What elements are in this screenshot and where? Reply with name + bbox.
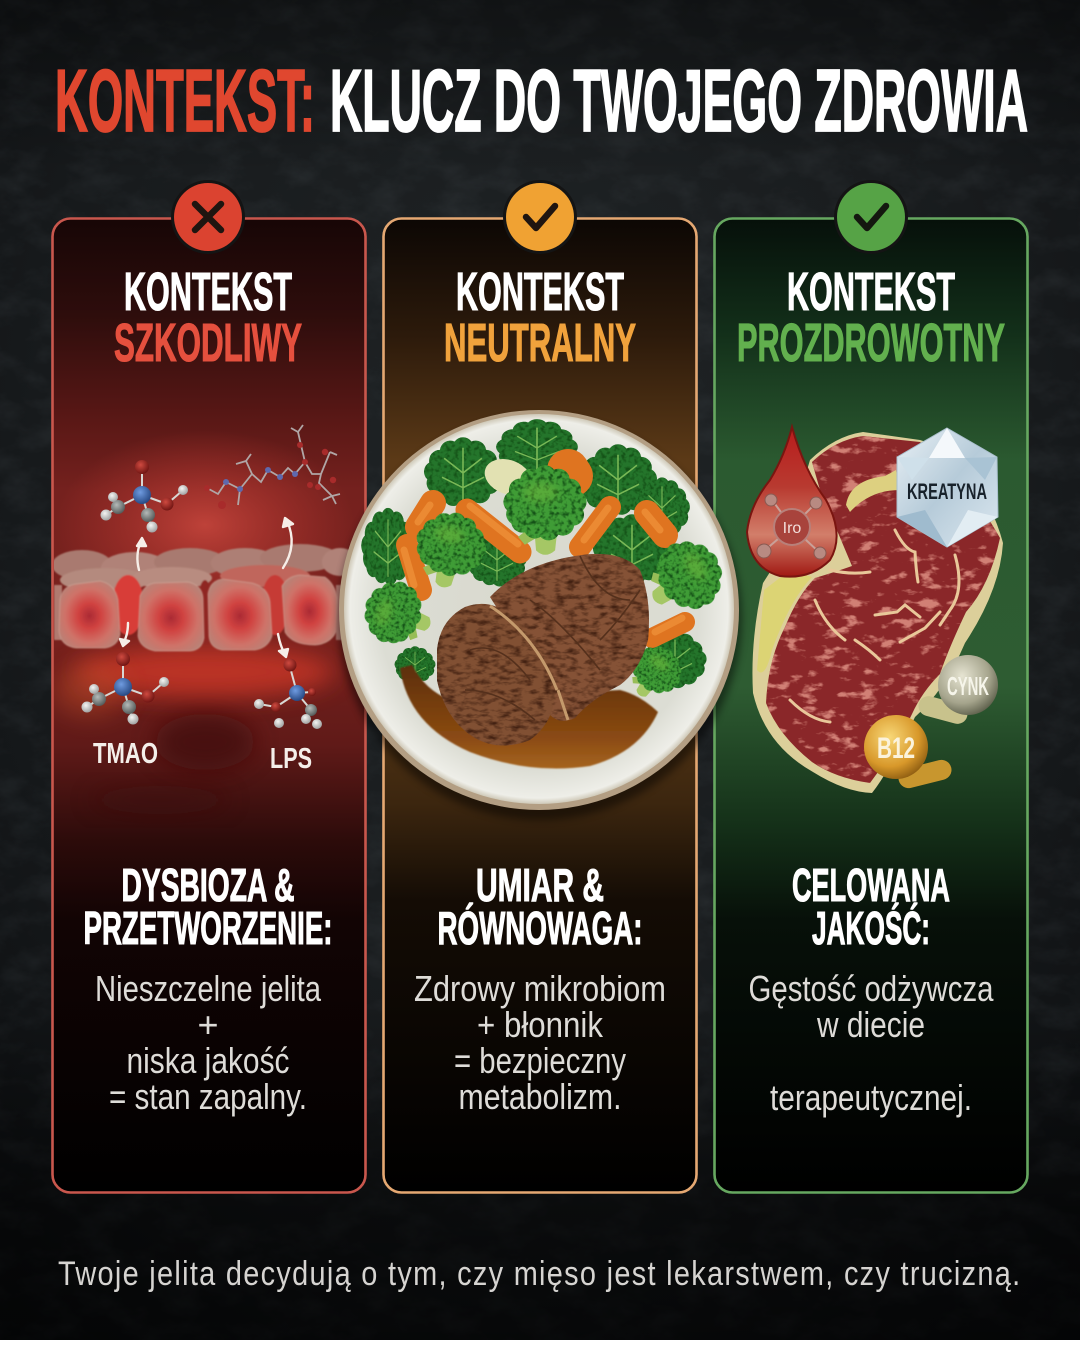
icon: creatine crystal [897,428,998,547]
label LPS: LPS [270,743,312,775]
icon: iron droplet: Iro [783,520,801,537]
text block: umiar: RÓWNOWAGA: [438,902,642,954]
plate [339,410,739,810]
text block: umiar: = bezpieczny [454,1040,626,1081]
heading: neutralny: NEUTRALNY [444,313,636,373]
text block: umiar: metabolizm. [458,1076,622,1117]
molecule LPS [254,658,322,729]
molecule TMAO [82,652,169,724]
heading: szkodliwy [114,262,302,373]
icon: b12 sphere [864,715,954,790]
text block: dysbioza [84,859,332,1117]
icon: red cross badge [171,180,245,254]
molecule top left [100,460,188,532]
long chain molecule [204,425,340,509]
illustration: inflamed gut barrier [54,424,348,770]
arrows [120,518,293,657]
footer tagline: Twoje jelita decydują o tym, czy mięso jest lekarstwem, czy trucizną. [58,1254,1020,1293]
heading: szkodliwy: SZKODLIWY [114,313,302,373]
text block: celowana: w diecie [816,1004,925,1045]
text block: celowana: CELOWANA [792,859,950,911]
text block: celowana [748,859,994,1118]
text block: umiar: + błonnik [477,1004,604,1045]
text block: dysbioza: PRZETWORZENIE: [84,902,332,954]
title [55,51,1028,150]
text block: dysbioza: DYSBIOZA & [122,859,294,911]
sauce [400,665,658,769]
heading: neutralny [444,262,636,373]
heading: prozdrowotny [737,262,1005,373]
illustration: raw steak with nutrients [747,427,1003,793]
text block: dysbioza: Nieszczelne jelita [95,968,322,1009]
icon: orange check badge [503,180,577,254]
gut fold band [52,544,358,644]
panel: szkodliwy background [52,218,366,1192]
text block: umiar: Zdrowy mikrobiom [414,968,666,1009]
gut cells [59,575,337,651]
icon: green check badge [834,180,908,254]
heading: neutralny: KONTEKST [456,262,624,322]
icon: iron droplet [747,427,837,577]
potato [480,453,536,501]
text block: celowana: Gęstość odżywcza [748,968,994,1009]
text block: umiar [414,859,666,1117]
text block: celowana: terapeutycznej. [770,1077,972,1118]
broccoli [355,465,736,710]
text block: celowana: JAKOŚĆ: [812,902,930,954]
text block: umiar: UMIAR & [476,859,604,911]
text block: dysbioza: + [197,1004,219,1045]
heading: szkodliwy: KONTEKST [124,262,292,322]
panel: prozdrowotny background [714,218,1028,1192]
illustration: plate with cooked beef and vegetables [338,410,742,820]
text block: dysbioza: = stan zapalny. [109,1076,307,1117]
kale leaves [361,419,707,688]
carrots [404,470,685,638]
icon: b12 sphere: B12 [877,732,915,765]
beef [437,554,649,746]
icon: creatine crystal: KREATYNA [907,479,987,504]
heading: prozdrowotny: KONTEKST [787,262,955,322]
title: KONTEKST: [55,51,315,150]
label TMAO: TMAO [93,738,158,770]
icon: zinc sphere: CYNK [947,671,989,701]
steak [752,432,1003,793]
text block: dysbioza: niska jakość [126,1040,290,1081]
panel: neutralny background [384,218,696,1192]
icon: zinc sphere [916,655,998,726]
